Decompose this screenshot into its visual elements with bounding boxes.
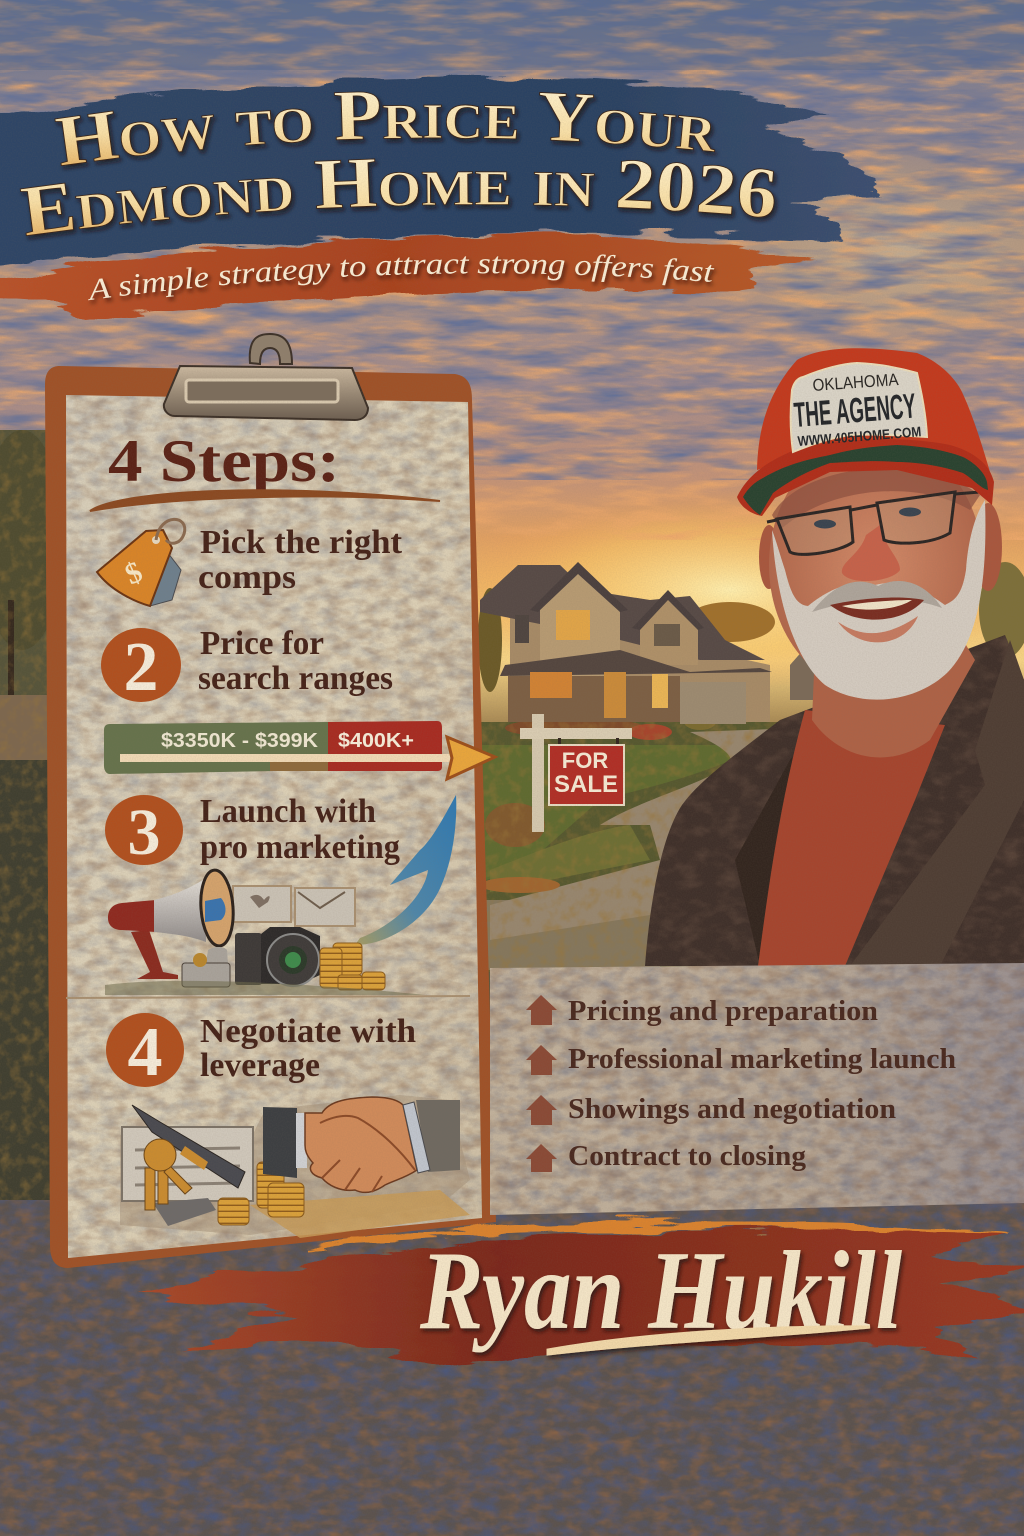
scene texture [482, 722, 776, 972]
neck [812, 635, 975, 757]
icon: price tag: $ [120, 555, 147, 591]
number badge 3: 3 [128, 796, 160, 869]
illustration backdrop [120, 1095, 470, 1235]
step 1: Pick the right [200, 524, 403, 561]
jacket [640, 630, 1024, 970]
signature: Ryan Hukill: Ryan Hukill [419, 1229, 902, 1353]
icon: keys [144, 1139, 192, 1210]
driveway path [490, 728, 800, 940]
icon: house [526, 1045, 557, 1075]
number badge 2: 2 [124, 629, 158, 706]
item: professional marketing launch: Professional marketing launch [568, 1043, 956, 1075]
garden bushes [480, 714, 716, 893]
heading: 4 Steps: 4 Steps: [108, 428, 340, 494]
step 1 [97, 519, 403, 606]
face [769, 437, 983, 693]
step 2 [101, 625, 393, 706]
subtitle: A simple strategy to attract strong offers fast [88, 254, 718, 306]
cap patch [791, 363, 927, 452]
number badge 4 [106, 1013, 184, 1091]
divider [66, 996, 470, 998]
for sale sign: FOR [562, 748, 608, 773]
icon: handshake [263, 1097, 460, 1192]
step 4 [106, 1013, 470, 1238]
clipboard board [45, 366, 496, 1268]
icon: camera [235, 927, 320, 986]
icon: coins [218, 1162, 304, 1225]
lawn [470, 722, 810, 972]
title: Edmond Home in 2026 [20, 158, 779, 241]
price range bar: $400K+ [338, 730, 414, 752]
panel: selling process checklist [490, 960, 1024, 1218]
step 4: leverage [200, 1047, 320, 1084]
background: trees at left edge [0, 430, 70, 1260]
presenter portrait [640, 348, 1024, 970]
step 2: search ranges [198, 660, 393, 697]
background: textured ground at bottom [0, 1200, 1024, 1536]
red t-shirt [758, 710, 945, 966]
item: showings and negotiation: Showings and negotiation [568, 1093, 896, 1125]
for sale sign: SALE [554, 771, 618, 798]
step 2: Price for [200, 625, 324, 662]
cap patch: WWW.405HOME.COM [797, 423, 922, 449]
icon: house [526, 995, 557, 1025]
title: How to Price Your [54, 92, 718, 171]
house body [480, 562, 835, 724]
item: pricing and preparation: Pricing and preparation [568, 995, 878, 1027]
icon: house [526, 1095, 557, 1125]
number badge 2 [101, 628, 181, 706]
step 3: Launch with [200, 793, 376, 830]
signature brush banner [140, 1222, 1024, 1365]
step 4: Negotiate with [200, 1013, 416, 1050]
price range bar [104, 721, 495, 779]
step 3: pro marketing [200, 829, 400, 866]
icon: blue growth arrow [355, 795, 456, 945]
number badge 4: 4 [128, 1014, 162, 1091]
item: contract to closing: Contract to closing [568, 1140, 807, 1172]
metal clip [164, 334, 368, 420]
nose [842, 525, 900, 581]
step 1: comps [198, 559, 296, 596]
step 3 [105, 793, 456, 995]
eyes [814, 508, 921, 528]
clipboard paper [60, 390, 490, 1270]
forehead shading [772, 468, 980, 530]
icon: documents [122, 1127, 253, 1226]
cap patch: OKLAHOMA [812, 370, 900, 395]
house scene [470, 562, 1024, 972]
icon: megaphone [108, 869, 236, 987]
subtitle brush banner [0, 235, 815, 318]
ground strip [105, 981, 425, 995]
white beard [772, 500, 985, 700]
arrow [120, 737, 495, 779]
for sale sign [520, 714, 632, 832]
distant trees [478, 562, 1024, 692]
title [20, 92, 779, 241]
icon: house [526, 1144, 557, 1172]
clipboard [45, 334, 496, 1270]
title brush banner [0, 78, 880, 268]
heading: 4 Steps [90, 428, 440, 511]
icon: pen [132, 1105, 245, 1188]
red cap [737, 348, 994, 516]
cap visor underside [743, 445, 988, 515]
ears [759, 503, 1002, 591]
icon: price tag [97, 519, 185, 606]
price range bar: $3350K - $399K [161, 730, 319, 752]
glasses [767, 492, 980, 554]
cap patch: THE AGENCY [793, 387, 917, 435]
icon: coin stacks [320, 943, 385, 990]
number badge 3 [105, 795, 183, 869]
icon: envelopes [233, 886, 355, 926]
